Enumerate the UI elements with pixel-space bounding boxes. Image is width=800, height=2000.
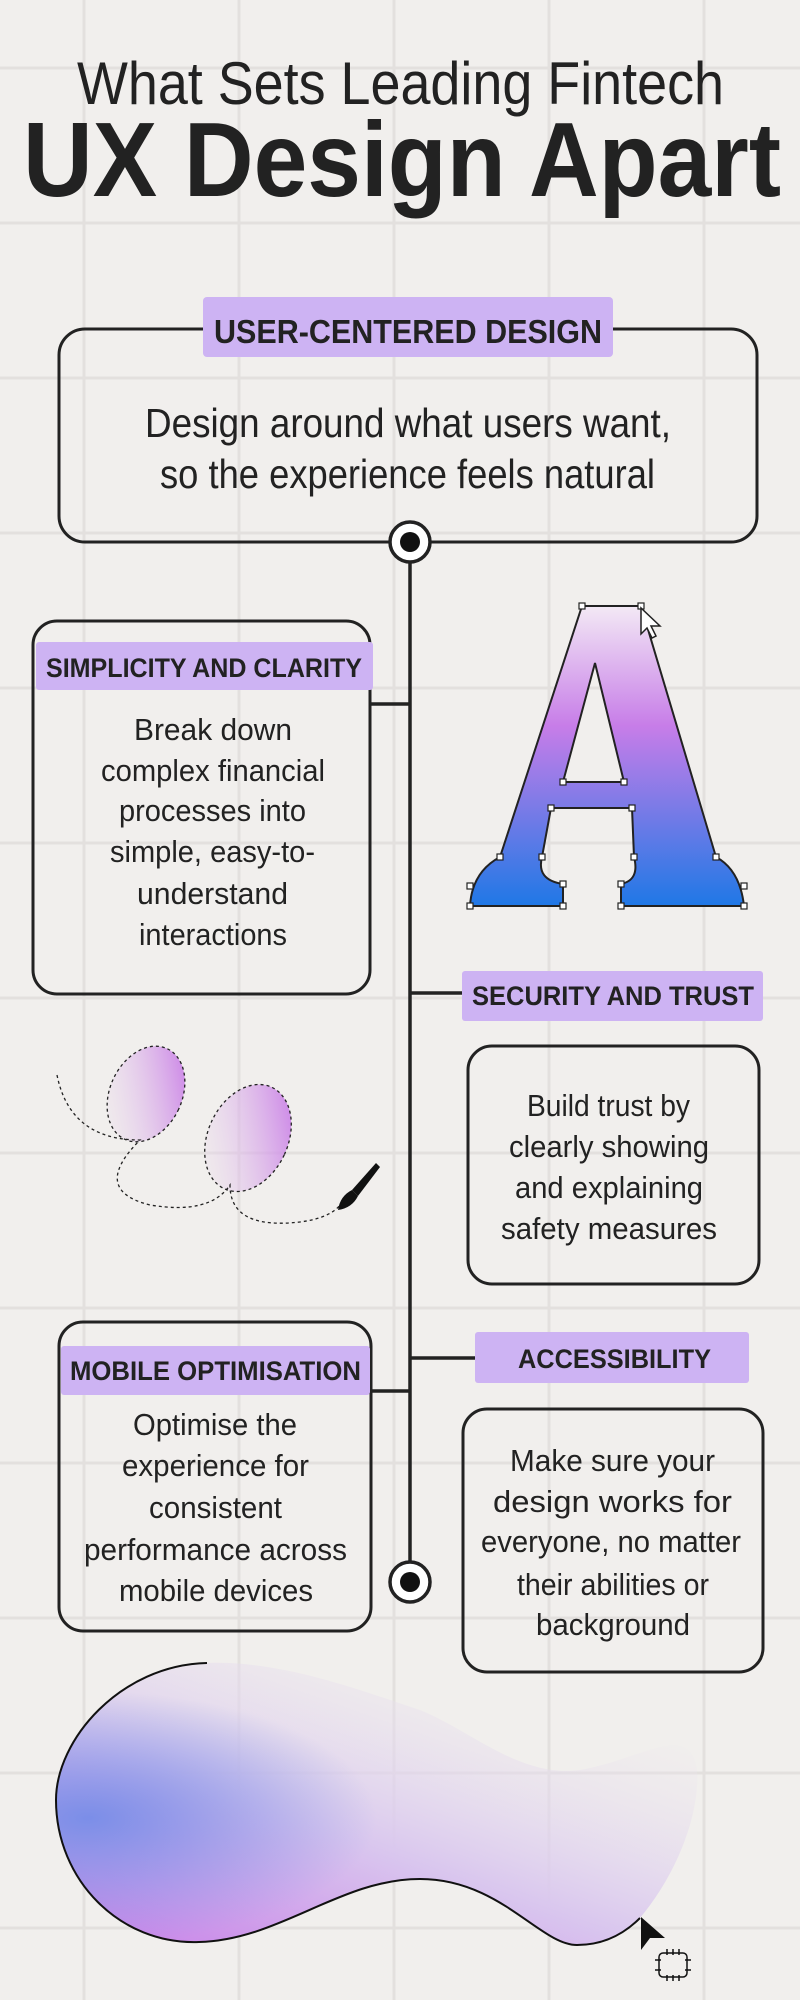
icon: cursor xyxy=(641,608,660,638)
label: user-centered design: USER-CENTERED DESIGN xyxy=(214,313,602,350)
panel: mobile optimisation: consistent xyxy=(149,1490,282,1525)
panel: mobile optimisation: mobile devices xyxy=(119,1573,313,1608)
label: simplicity xyxy=(36,642,373,690)
icon: brush doodle xyxy=(57,1033,380,1223)
panel: mobile optimisation xyxy=(59,1322,371,1631)
icon: cursor xyxy=(641,1917,665,1950)
icon: letter A xyxy=(467,603,747,909)
label: simplicity: SIMPLICITY AND CLARITY xyxy=(46,653,362,683)
icon: top node xyxy=(390,522,430,562)
panel: simplicity and clarity: complex financial xyxy=(101,753,325,788)
panel: accessibility: their abilities or xyxy=(517,1567,709,1602)
label: security: SECURITY AND TRUST xyxy=(472,981,754,1011)
label: mobile: MOBILE OPTIMISATION xyxy=(70,1356,361,1386)
label: accessibility xyxy=(475,1332,749,1383)
panel: security and trust: Build trust by xyxy=(527,1088,690,1123)
label: user-centered design xyxy=(203,297,613,357)
icon: gradient blob xyxy=(56,1663,697,1981)
panel: mobile optimisation: experience for xyxy=(122,1448,309,1483)
label: accessibility: ACCESSIBILITY xyxy=(518,1344,711,1374)
panel: accessibility: Make sure your xyxy=(510,1443,715,1478)
panel: user-centered design xyxy=(59,297,757,542)
panel: security and trust xyxy=(462,971,763,1284)
panel: mobile optimisation: Optimise the xyxy=(133,1407,297,1442)
panel: user-centered design: Design around what users want, xyxy=(145,400,671,446)
panel: security and trust: safety measures xyxy=(501,1211,717,1246)
panel: simplicity and clarity: simple, easy-to- xyxy=(110,834,315,869)
panel: simplicity and clarity: understand xyxy=(137,876,288,911)
panel: accessibility: design works for xyxy=(493,1484,732,1519)
panel: accessibility xyxy=(463,1332,763,1672)
title xyxy=(23,50,781,219)
label: security xyxy=(462,971,763,1021)
icon: bottom node xyxy=(390,1562,430,1602)
panel: security and trust: and explaining xyxy=(515,1170,703,1205)
timeline line xyxy=(370,542,475,1582)
icon: chip xyxy=(655,1949,691,1981)
panel: simplicity and clarity: interactions xyxy=(139,917,287,952)
panel: user-centered design: so the experience feels natural xyxy=(160,451,655,497)
panel: simplicity and clarity: Break down xyxy=(134,712,292,747)
panel: accessibility: everyone, no matter xyxy=(481,1524,741,1559)
label: mobile xyxy=(61,1346,370,1395)
title: What Sets Leading Fintech xyxy=(77,50,724,117)
panel: simplicity and clarity xyxy=(33,621,373,994)
panel: mobile optimisation: performance across xyxy=(84,1532,347,1567)
panel: simplicity and clarity: processes into xyxy=(119,793,306,828)
panel: security and trust: clearly showing xyxy=(509,1129,709,1164)
panel: accessibility: background xyxy=(536,1607,690,1642)
